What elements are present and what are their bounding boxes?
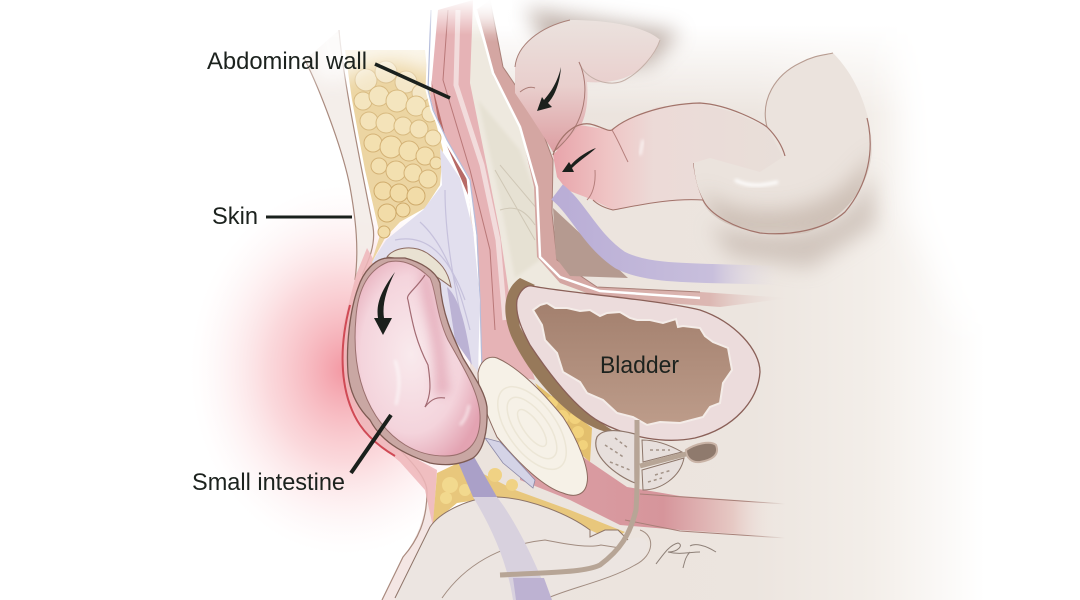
illustration: inguinal hernia cross-section [193, 0, 944, 600]
label: abdominal wall: Abdominal wall [207, 48, 367, 75]
hernia: small intestine [355, 261, 480, 456]
bladder wall [517, 286, 760, 440]
arrow: hernia direction [374, 272, 395, 335]
label: small intestine [192, 415, 391, 496]
fascia: blue-white tissue [372, 148, 480, 372]
red inflammation glow [190, 185, 500, 555]
lower muscle band [520, 380, 785, 538]
hernia: outer sac [343, 258, 487, 465]
arrow: lower intestine [562, 148, 596, 172]
seminal vesicle [686, 443, 717, 462]
small intestine loop: middle [553, 103, 785, 210]
peritoneal band and lower pelvic fold [472, 0, 790, 307]
fat layer: abdominal wall [300, 15, 443, 280]
pink layer around hernia [342, 248, 437, 527]
vessel: purple pelvic vein [557, 192, 790, 276]
muscle layer: abdominal wall [420, 0, 535, 380]
background tissue shading [470, 0, 944, 600]
brown perivesical tissue [505, 278, 625, 438]
label: skin: Skin [212, 203, 258, 230]
skin layer [305, 30, 437, 600]
urethra [500, 420, 686, 575]
groin and lower body [395, 497, 651, 600]
signature [656, 543, 716, 568]
fat layer: pelvis [433, 383, 625, 540]
large intestine loop: right [693, 53, 880, 240]
label: bladder: Bladder [600, 352, 679, 379]
arrow: upper intestine [537, 67, 561, 111]
large intestine loop: upper [515, 20, 660, 152]
fascia strip under ovoid [485, 438, 535, 488]
vessel: spermatic cord [458, 455, 552, 600]
label: abdominal wall [207, 48, 450, 98]
label: small intestine: Small intestine [192, 469, 345, 496]
peritoneal cap over hernia sac [387, 248, 451, 287]
label: skin [212, 203, 352, 230]
bladder cavity [533, 303, 732, 425]
white connective tissue fan [470, 0, 630, 300]
white ovoid: pubic bone [478, 357, 587, 495]
prostate [596, 431, 684, 490]
